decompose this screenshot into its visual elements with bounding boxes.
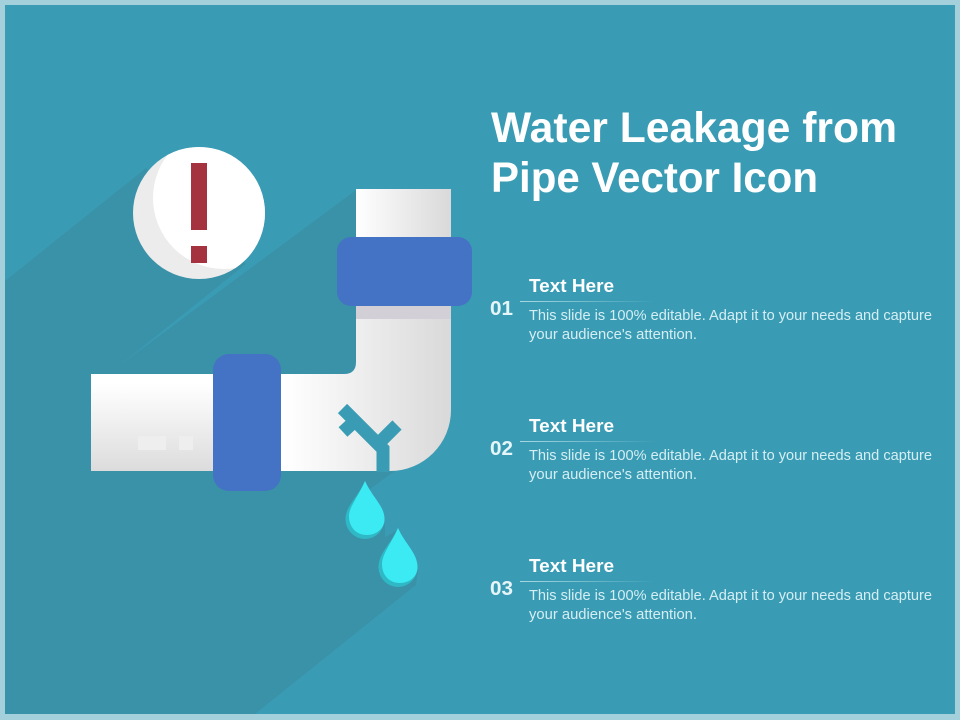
item 02: Text Here — [529, 416, 614, 436]
item 03 — [490, 556, 932, 623]
left blue band — [213, 354, 281, 491]
item 03: Text Here — [529, 556, 614, 576]
item 02: This slide is 100% editable. Adapt it to your needs and capture — [529, 448, 932, 464]
item 03: 03 — [490, 578, 513, 600]
top blue band — [337, 237, 472, 306]
pipe elbow — [278, 300, 451, 471]
icon: leaking pipe — [91, 189, 472, 491]
long shadow behind icon — [5, 168, 418, 714]
icon: water drop 1 — [346, 481, 384, 539]
title — [491, 104, 897, 202]
item 02 — [490, 416, 932, 483]
item 02: 02 — [490, 438, 513, 460]
item 03: your audience's attention. — [529, 607, 697, 623]
exclamation mark — [191, 163, 207, 263]
item 01: Text Here — [529, 276, 614, 296]
title: Water Leakage from — [491, 104, 897, 152]
crack — [342, 408, 397, 472]
pipe vent marks — [138, 436, 193, 450]
icon: water drop 2 — [378, 528, 418, 587]
item 01: your audience's attention. — [529, 327, 697, 343]
pipe top section — [356, 189, 451, 239]
item 03: This slide is 100% editable. Adapt it to your needs and capture — [529, 588, 932, 604]
item 01: 01 — [490, 298, 513, 320]
item 01 — [490, 276, 932, 343]
item 01: This slide is 100% editable. Adapt it to your needs and capture — [529, 308, 932, 324]
pipe left section — [91, 374, 216, 471]
band shadow — [356, 304, 451, 319]
icon: alert circle — [133, 147, 265, 279]
title: Pipe Vector Icon — [491, 154, 818, 202]
item 02: your audience's attention. — [529, 467, 697, 483]
